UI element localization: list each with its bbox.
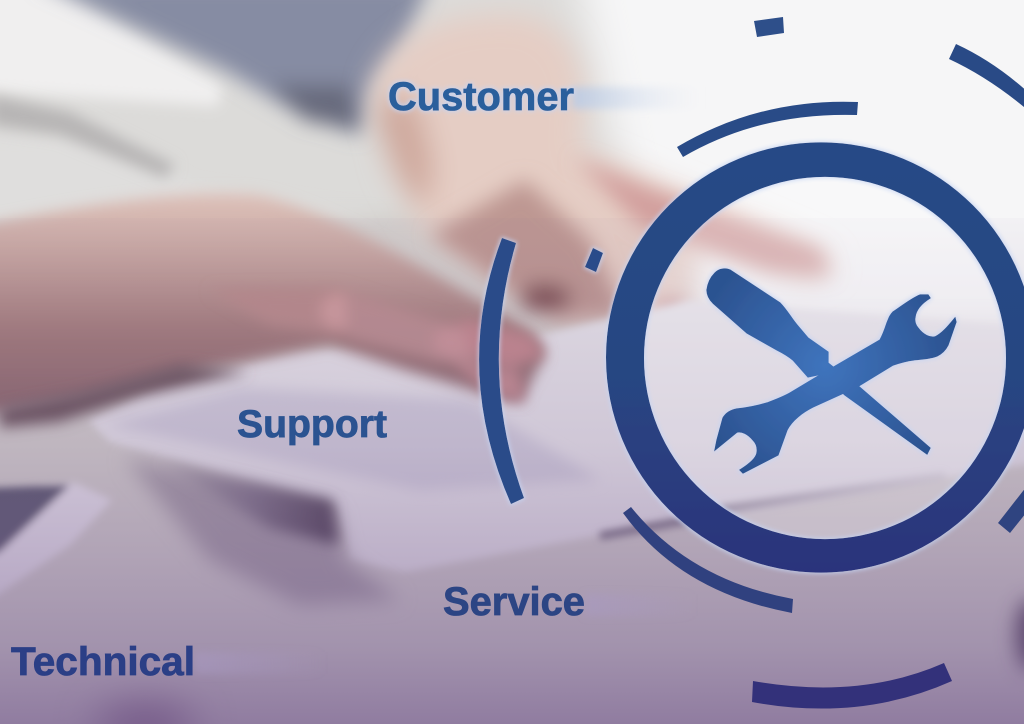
photo: grey fabric streak xyxy=(0,95,175,178)
arc: top dash xyxy=(754,17,784,37)
arc: lower left xyxy=(623,507,793,613)
label: Service: Service xyxy=(443,580,585,624)
arc: right lower xyxy=(998,482,1024,533)
arc: bottom tapered xyxy=(752,663,952,709)
photo: front-hand shadow xyxy=(0,365,250,428)
arc: small left dash xyxy=(585,248,603,272)
arc: top right xyxy=(949,44,1024,112)
photo: white blanket top left xyxy=(0,0,380,225)
photo: keyboard xyxy=(88,300,1024,572)
photo: back hand xyxy=(372,14,835,370)
screwdriver xyxy=(707,269,930,454)
text trail: Customer xyxy=(572,87,702,109)
purple gradient overlay xyxy=(0,218,1024,724)
icon: pale circle interior xyxy=(642,175,1008,541)
icon: main ring xyxy=(606,142,1024,573)
photo: desk shadow xyxy=(125,458,400,605)
photo: back hand fingers xyxy=(430,158,830,370)
label: Customer: Customer xyxy=(388,75,574,119)
photo: bright top right xyxy=(570,0,1024,340)
wrench xyxy=(715,295,956,473)
photo: blue sleeve xyxy=(35,0,430,135)
photo: keyboard front edge shadow xyxy=(600,476,945,536)
text trail: Technical xyxy=(195,652,325,674)
label: Support: Support xyxy=(237,403,387,446)
photo: bottom dark blotches xyxy=(95,705,195,724)
arc: left tapered xyxy=(479,238,524,504)
text trail: Service xyxy=(585,594,695,616)
photo: phone xyxy=(0,483,112,600)
label: Technical: Technical xyxy=(11,640,195,684)
photo: front hand fingers xyxy=(210,288,545,402)
arc: upper xyxy=(677,102,858,157)
photo: top light area xyxy=(0,0,1024,215)
photo: keyboard top plane xyxy=(105,388,600,490)
icon: crossed screwdriver and wrench xyxy=(707,269,956,473)
photo: front hand xyxy=(0,193,545,415)
